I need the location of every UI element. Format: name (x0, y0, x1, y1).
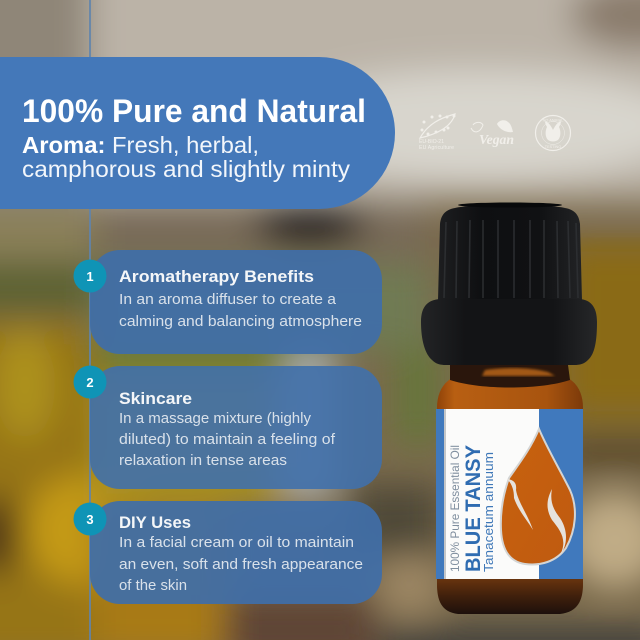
dropper cap ribbed section (438, 202, 582, 300)
card 3 body text: In a facial cream or oil to maintain (119, 535, 354, 551)
heading: 100% Pure and Natural: 100% Pure and Natural (22, 93, 366, 129)
card 2 heading: Skincare (119, 389, 192, 408)
product label (436, 409, 583, 579)
label drop icon (501, 429, 575, 564)
icon: no animal testing: NO ANIMAL (543, 118, 563, 122)
label text: 100% Pure Essential Oil: 100% Pure Essential Oil (448, 445, 462, 572)
EU badge caption: EU-BIO-21 (419, 139, 444, 145)
card 2 body text: relaxation in tense areas (119, 453, 287, 469)
card 2 body text (119, 411, 336, 469)
icon: Vegan logo (471, 120, 514, 148)
bottle base dark glass (437, 578, 583, 614)
card 3 heading: DIY Uses (119, 513, 191, 532)
number badge 1: 1 (86, 269, 94, 284)
card 1: Aromatherapy Benefits (90, 250, 382, 354)
label text: Tanacetum annuum: Tanacetum annuum (481, 452, 496, 572)
aroma description line 2: camphorous and slightly minty (22, 156, 351, 182)
icon: Vegan logo: Vegan (479, 133, 514, 148)
card 3: DIY Uses (90, 501, 382, 604)
card 2 body text: diluted) to maintain a feeling of (119, 432, 336, 448)
card 3 body text (119, 535, 363, 594)
card 3 body text: of the skin (119, 578, 187, 594)
icon: EU organic leaf (419, 114, 456, 151)
bottle neck (450, 365, 570, 388)
icon: no animal testing: TESTING (545, 145, 561, 149)
number badge 3 (74, 502, 106, 536)
number badge 3: 3 (86, 512, 94, 527)
icon: no animal testing (536, 116, 570, 150)
number badge 1 (74, 260, 106, 292)
label text: BLUE TANSY: BLUE TANSY (462, 445, 485, 572)
icon: EU organic leaf: EU Agriculture (419, 145, 454, 151)
header panel (0, 57, 395, 209)
number badge 2: 2 (86, 375, 94, 390)
card 2: Skincare (90, 366, 382, 489)
dropper cap collar (421, 299, 597, 365)
bottle shoulder and body (437, 378, 583, 613)
card 1 heading: Aromatherapy Benefits (119, 267, 314, 286)
card 1 body text: In an aroma diffuser to create a (119, 292, 337, 308)
vertical timeline line (89, 0, 91, 640)
card 1 body text: calming and balancing atmosphere (119, 314, 362, 330)
aroma description line 1: Aroma: Fresh, herbal, (22, 132, 259, 158)
card 2 body text: In a massage mixture (highly (119, 411, 312, 427)
product bottle (421, 202, 597, 614)
card 3 body text: an even, soft and fresh appearance (119, 557, 363, 573)
card 1 body text (119, 292, 362, 330)
number badge 2 (74, 366, 106, 398)
